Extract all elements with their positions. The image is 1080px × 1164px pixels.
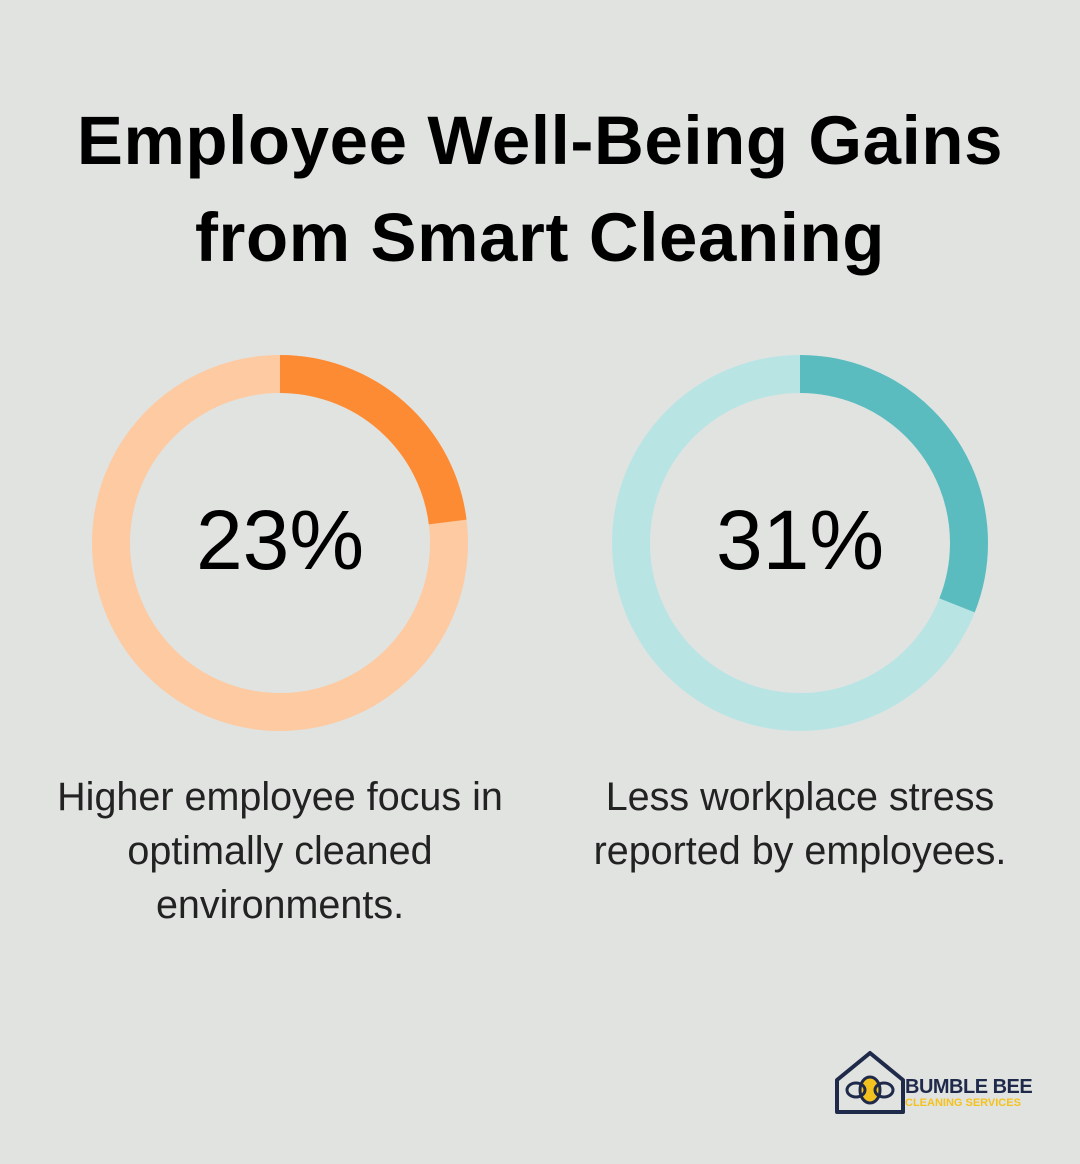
title [77,102,1003,276]
number 23%: 23% [196,493,364,587]
title: Employee Well-Being Gains [77,102,1003,179]
title: from Smart Cleaning [195,199,885,276]
number 31%: 31% [716,493,884,587]
logo: CLEANING SERVICES [905,1097,1021,1109]
caption right: Less workplace stress reported by employees. [594,775,1006,873]
logo: BUMBLE BEE [905,1076,1032,1098]
caption left: Higher employee focus in optimally cleaned environments. [57,775,503,927]
chart: donut 31% [612,355,988,731]
logo [835,1050,1032,1114]
